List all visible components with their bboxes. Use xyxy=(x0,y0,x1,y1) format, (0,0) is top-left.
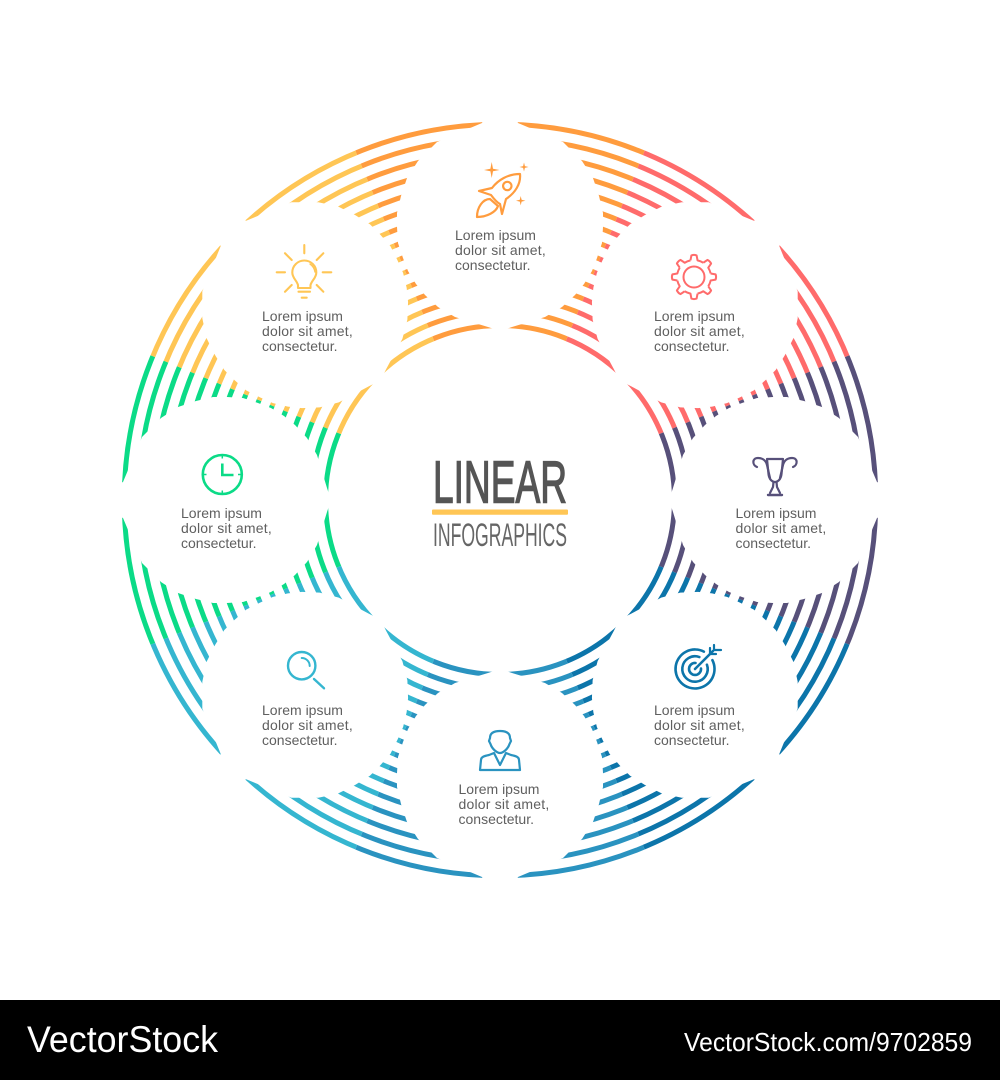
icon: trophy xyxy=(753,458,797,495)
text block: dolor sit amet, xyxy=(736,520,826,536)
footer logo text: VectorStock xyxy=(27,1019,218,1060)
panel: left clock xyxy=(110,397,331,603)
text block: consectetur. xyxy=(262,338,338,354)
text block: Lorem ipsum xyxy=(458,781,539,797)
text block: dolor sit amet, xyxy=(262,323,353,339)
center title xyxy=(432,450,568,553)
title underline xyxy=(432,510,568,515)
text block: consectetur. xyxy=(654,732,730,748)
icon: rocket xyxy=(477,162,528,217)
text block: dolor sit amet, xyxy=(654,717,745,733)
text block: Lorem ipsum xyxy=(654,308,735,324)
text block: Lorem ipsum xyxy=(262,702,343,718)
panel: lower left magnifier xyxy=(151,547,453,849)
text block: Lorem ipsum xyxy=(736,505,816,521)
icon: clock xyxy=(203,455,242,494)
text block: dolor sit amet, xyxy=(181,520,272,536)
text block: dolor sit amet, xyxy=(458,796,549,812)
text block: Lorem ipsum xyxy=(262,308,343,324)
icon: person xyxy=(480,731,520,770)
panel: upper left bulb xyxy=(151,151,453,453)
text block: consectetur. xyxy=(455,257,530,273)
text block: Lorem ipsum xyxy=(181,505,262,521)
icon: light bulb xyxy=(277,245,331,298)
text block: dolor sit amet, xyxy=(455,242,546,258)
text block: consectetur. xyxy=(654,338,730,354)
panel: upper right gear xyxy=(547,151,849,453)
heading: linear: LINEAR xyxy=(433,450,567,516)
subheading: infographics: INFOGRAPHICS xyxy=(433,517,567,553)
icon: magnifier xyxy=(288,652,324,688)
panel: top rocket xyxy=(397,110,603,331)
text block: dolor sit amet, xyxy=(262,717,353,733)
icon: gear xyxy=(672,255,716,299)
panel: bottom person xyxy=(397,669,603,890)
text block: consectetur. xyxy=(736,535,811,551)
text block: consectetur. xyxy=(458,811,534,827)
concentric ring segments xyxy=(124,124,876,876)
icon: target xyxy=(676,645,721,688)
text block: Lorem ipsum xyxy=(455,227,536,243)
panel: lower right target xyxy=(547,547,849,849)
text block: consectetur. xyxy=(181,535,256,551)
footer url text: VectorStock.com/9702859 xyxy=(684,1027,972,1057)
text block: Lorem ipsum xyxy=(654,702,735,718)
text block: dolor sit amet, xyxy=(654,323,745,339)
footer bar xyxy=(0,1000,1000,1080)
panel: right trophy xyxy=(669,397,890,603)
text block: consectetur. xyxy=(262,732,338,748)
